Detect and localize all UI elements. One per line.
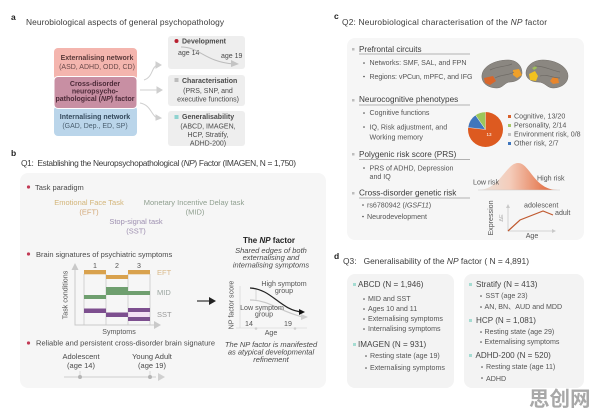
NP factor score line chart: High symptom xyxy=(261,280,307,288)
externalising network box xyxy=(54,48,137,80)
characterisation box xyxy=(168,75,245,106)
NP factor score line chart: group xyxy=(275,287,293,295)
IMAGEN cohort: IMAGEN (N = 931) xyxy=(358,340,426,349)
NP factor score line chart: group xyxy=(255,310,273,318)
expression by age chart: adult xyxy=(555,209,570,217)
brain signatures heading: Brain signatures of psychiatric symptoms xyxy=(36,250,173,259)
NP factor score line chart: Age xyxy=(265,329,277,337)
NP factor developmental note xyxy=(225,340,318,364)
task conditions by symptoms chart: 2 xyxy=(115,262,119,270)
brain maps xyxy=(482,60,568,88)
neurocognitive phenotypes: Working memory xyxy=(370,134,423,142)
NP factor score line chart xyxy=(228,280,308,337)
generalisability box: Generalisability xyxy=(182,114,234,121)
task paradigm section: Emotional Face Task xyxy=(54,198,124,207)
task paradigm section: (MID) xyxy=(186,208,205,216)
characterisation box: Characterisation xyxy=(182,78,237,85)
neurocognitive phenotypes: Cognitive functions xyxy=(370,109,430,117)
cross-disorder genetic risk: Neurodevelopment xyxy=(367,213,427,221)
task conditions by symptoms chart: SST xyxy=(157,310,172,319)
task paradigm section: Task paradigm xyxy=(35,183,84,192)
generalisability box: ADHD-200) xyxy=(190,140,226,148)
ADHD-200 cohort: ADHD-200 (N = 520) xyxy=(476,351,551,360)
pie chart xyxy=(468,112,503,147)
cross-disorder NP factor box: neuropsycho- xyxy=(72,88,119,96)
left cohort card xyxy=(347,274,454,388)
pie legend: Other risk, 2/7 xyxy=(514,140,559,148)
reliable signature timeline xyxy=(27,338,215,381)
internalising network box: Internalising network xyxy=(60,114,130,121)
arrows from NP factor to aims xyxy=(140,62,162,120)
cross-disorder NP factor box: pathological (NP) factor xyxy=(56,96,135,103)
prefrontal circuits xyxy=(352,45,472,81)
task paradigm section: Monetary Incentive Delay task xyxy=(144,198,244,207)
NP factor score line chart: 19 xyxy=(284,320,292,328)
generalisability box xyxy=(168,111,245,148)
reliable signature timeline: (age 19) xyxy=(138,361,166,370)
ABCD cohort: Externalising symptoms xyxy=(368,315,443,323)
reliable signature timeline: (age 14) xyxy=(67,361,95,370)
neurocognitive phenotypes xyxy=(352,95,470,142)
development box xyxy=(168,36,245,69)
cross-disorder NP factor box: Cross-disorder xyxy=(70,81,120,88)
ADHD-200 cohort: ADHD xyxy=(486,375,506,383)
reliable signature timeline: Adolescent xyxy=(62,352,100,361)
Stratify cohort: Stratify (N = 413) xyxy=(476,280,538,289)
ABCD cohort: Ages 10 and 11 xyxy=(368,305,417,313)
development box: age 19 xyxy=(221,53,243,60)
expression by age chart: ΔE xyxy=(499,214,505,222)
ADHD-200 cohort: Resting state (age 11) xyxy=(486,363,555,371)
arrow to NP factor xyxy=(197,297,216,305)
ADHD-200 cohort xyxy=(469,351,555,383)
ABCD cohort: Internalising symptoms xyxy=(368,325,441,333)
ABCD cohort: ABCD (N = 1,946) xyxy=(358,280,424,289)
externalising network box: (ASD, ADHD, ODD, CD) xyxy=(59,64,135,71)
pie chart: 13 xyxy=(486,132,492,137)
task conditions by symptoms chart: 1 xyxy=(93,262,97,270)
panel d: Q3 xyxy=(334,251,584,388)
panel c background xyxy=(347,38,584,240)
Stratify cohort: AN, BN、AUD and MDD xyxy=(484,303,562,311)
development box: Development xyxy=(182,38,227,46)
panel b: Q1 xyxy=(11,148,326,388)
IMAGEN cohort xyxy=(353,340,445,372)
NP factor developmental note: The NP factor is manifested xyxy=(225,340,318,349)
pie legend: Environment risk, 0/8 xyxy=(514,130,581,138)
NP factor heading and description: internalising symptoms xyxy=(233,260,309,270)
internalising network box xyxy=(54,106,137,136)
reliable signature timeline: Young Adult xyxy=(132,352,173,361)
NP factor score line chart: NP factor score xyxy=(228,281,236,329)
expression by age chart: Age xyxy=(526,232,538,240)
NP factor score line chart: Low symptom xyxy=(240,304,284,312)
pie legend: Personality, 2/14 xyxy=(514,122,566,130)
cross-disorder genetic risk: Cross-disorder genetic risk xyxy=(359,188,457,198)
task paradigm section: (EFT) xyxy=(79,208,99,216)
task conditions by symptoms chart: MID xyxy=(157,288,171,297)
Stratify cohort: SST (age 23) xyxy=(486,292,528,300)
polygenic risk score: PRS of ADHD, Depression xyxy=(370,164,454,172)
NP factor developmental note: as atypical developmental xyxy=(228,348,314,356)
risk distribution curve xyxy=(473,163,565,190)
neurocognitive phenotypes: IQ, Risk adjustment, and xyxy=(370,124,447,132)
panel c: Q2 xyxy=(334,11,584,240)
pie legend xyxy=(508,112,581,148)
prefrontal circuits: Regions: vPCun, mPFC, and IFG xyxy=(370,73,472,81)
pie legend: Cognitive, 13/20 xyxy=(514,112,565,120)
task paradigm section: Stop-signal task xyxy=(109,217,163,226)
reliable signature timeline: Reliable and persistent cross-disorder brain signature xyxy=(36,338,215,348)
HCP cohort: Resting state (age 29) xyxy=(484,328,554,336)
panel letter b: b xyxy=(11,148,16,158)
NP factor developmental note: refinement xyxy=(253,355,290,364)
right cohort card xyxy=(464,274,584,388)
task conditions by symptoms chart: Symptoms xyxy=(102,328,136,336)
HCP cohort: Externalising symptoms xyxy=(484,338,560,346)
watermark: 思创网 xyxy=(529,382,590,412)
cross-disorder genetic risk: rs6780942 (IGSF11) xyxy=(367,202,431,210)
polygenic risk score: and IQ xyxy=(370,173,391,181)
task conditions by symptoms chart: 3 xyxy=(137,262,141,270)
task conditions by symptoms chart: EFT xyxy=(157,268,172,277)
NP factor heading and description: Shared edges of both xyxy=(235,246,307,255)
panel b background xyxy=(20,173,326,388)
internalising network box: (GAD, Dep., ED, SP) xyxy=(62,123,128,130)
task paradigm section xyxy=(27,183,244,236)
polygenic risk score: Polygenic risk score (PRS) xyxy=(359,150,457,159)
task conditions by symptoms chart xyxy=(62,262,172,336)
panel letter c: c xyxy=(334,11,339,21)
characterisation box: executive functions) xyxy=(177,96,239,104)
expression by age chart: Expression xyxy=(487,200,495,236)
task conditions by symptoms chart: Task conditions xyxy=(62,270,70,319)
risk distribution curve: Low risk xyxy=(473,178,499,186)
IMAGEN cohort: Resting state (age 19) xyxy=(370,352,440,360)
IMAGEN cohort: Externalising symptoms xyxy=(370,364,445,372)
generalisability box: (ABCD, IMAGEN, xyxy=(180,124,236,130)
cross-disorder NP factor box xyxy=(54,76,137,108)
expression by age chart xyxy=(487,200,570,240)
ABCD cohort xyxy=(353,280,443,333)
heading b: Q1: Establishing the Neuropsychopathological (NP) Factor (IMAGEN, N = 1,750) xyxy=(21,158,296,168)
polygenic risk score xyxy=(352,150,470,181)
neurocognitive phenotypes: Neurocognitive phenotypes xyxy=(359,95,458,104)
NP factor heading and description: externalising and xyxy=(243,253,300,262)
heading a: Neurobiological aspects of general psychopathology xyxy=(26,17,225,27)
prefrontal circuits: Prefrontal circuits xyxy=(359,45,422,54)
NP factor heading and description: The NP factor xyxy=(243,236,295,245)
prefrontal circuits: Networks: SMF, SAL, and FPN xyxy=(370,59,466,67)
ABCD cohort: MID and SST xyxy=(368,295,411,303)
expression by age chart: adolescent xyxy=(524,202,558,210)
NP factor heading and description xyxy=(233,236,309,270)
risk distribution curve: High risk xyxy=(537,174,565,182)
heading d: Q3: Generalisability of the NP factor ( N = 4,891) xyxy=(343,256,529,266)
heading c: Q2: Neurobiological characterisation of the NP factor xyxy=(342,17,547,27)
cross-disorder genetic risk xyxy=(352,188,470,221)
panel a: neurobiological aspects xyxy=(11,12,245,148)
HCP cohort xyxy=(469,316,560,346)
externalising network box: Externalising network xyxy=(61,55,133,62)
panel letter a: a xyxy=(11,12,16,22)
NP factor score line chart: 14 xyxy=(245,320,253,328)
task paradigm section: (SST) xyxy=(126,226,146,236)
development box: age 14 xyxy=(178,50,200,57)
Stratify cohort xyxy=(469,280,562,311)
characterisation box: (PRS, SNP, and xyxy=(183,88,233,95)
HCP cohort: HCP (N = 1,081) xyxy=(476,316,536,325)
panel letter d: d xyxy=(334,251,339,261)
generalisability box: HCP, Stratify, xyxy=(188,132,229,139)
